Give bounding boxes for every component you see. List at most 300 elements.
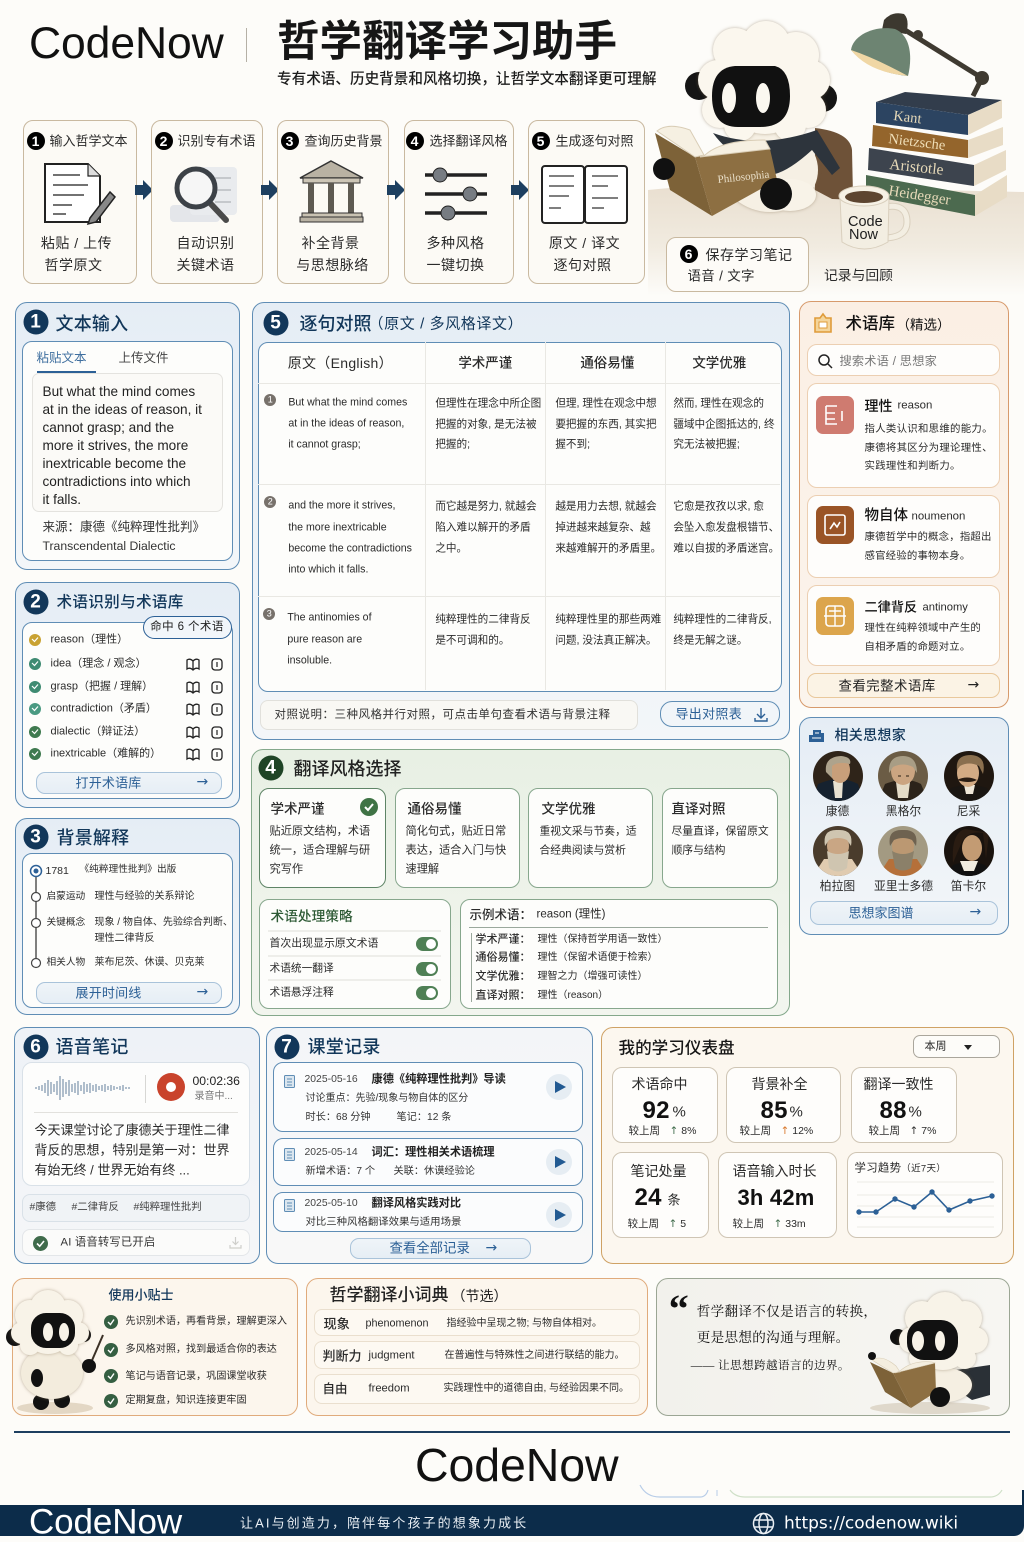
panel 5: comparison: 5 [270,312,281,333]
step card 6: 6 [685,246,692,262]
panel 4: translation style: 理性（保持哲学用语一致性） [538,934,668,944]
tip list [104,1315,118,1408]
panel 5: comparison: 逐句对照 [300,314,372,334]
panel: dashboard: 较上周 [628,1217,659,1229]
button: 查看全部记录 [390,1240,470,1255]
panel 3: background: 相关人物 [46,957,85,968]
panel 6: voice note: #康德 [30,1201,56,1212]
panel: tips: 多风格对照，找到最适合你的表达 [126,1343,277,1354]
comparison table: pure reason are [287,634,362,646]
panel 4: translation style: 简化句式，贴近日常 [406,825,506,837]
source text: But what the mind comes [42,384,195,398]
panel 7: class records: 关联：休谟经验论 [394,1165,475,1176]
button: 打开术语库 [76,775,142,790]
comparison table: 1 [268,395,273,405]
panel: dashboard: ↑ 12% [780,1124,813,1136]
arrow 3 [387,180,404,200]
panel 4: translation style: 理智之力（增强可读性） [538,970,648,982]
panel: dashboard: 翻译一致性 [864,1076,934,1092]
panel: dashboard: 学习趋势（近7天） [854,1162,946,1174]
panel: glossary: 自相矛盾的命题对立。 [864,641,970,652]
panel 4: translation style: 术语悬浮注释 [270,986,334,998]
button [810,900,998,924]
panel: thinkers: 康德 [826,804,849,818]
comparison table: 原文（English） [288,355,393,371]
panel 5: comparison: （原文 / 多风格译文） [368,315,523,332]
panel: dashboard: ↑ 7% [910,1124,936,1136]
panel: glossary: 物自体 [864,507,908,523]
term card: reason [806,382,1000,488]
panel: dashboard: 较上周 [732,1217,764,1229]
panel 7: class records: 7 [281,1036,292,1057]
panel: dashboard: ↑ 8% [670,1124,696,1136]
comparison table: 越是用力去想, 就越会 [555,501,657,513]
panel 1: text input: 来源：康德《纯粹理性批判》 [42,519,205,533]
panel: dashboard: 背景补全 [752,1076,808,1092]
comparison table: 而它越是努力, 就越会 [435,501,537,513]
comparison table: 它愈是孜孜以求, 愈 [673,501,764,513]
panel: dashboard: 语音输入时长 [732,1162,816,1178]
panel: dictionary: 哲学翻译小词典 [330,1285,448,1304]
book stack: Aristotle [889,156,944,179]
lamp [851,13,989,96]
step card 2: 自动识别 [176,234,234,250]
source text: cannot grasp; and the [42,420,174,434]
comparison table: insoluble. [287,655,332,667]
term list: inextricable（难解的） [50,747,161,759]
term list: contradiction（矛盾） [50,702,157,714]
panel: tips [12,1278,298,1416]
comparison table: 终是无解之谜。 [673,635,747,647]
button: → [968,676,979,692]
period selector [912,1034,1000,1058]
panel 4: translation style: 统一，适合理解与研 [270,844,370,856]
comparison table: 会坠入愈发盘根错节、 [673,522,779,534]
button: → [196,984,208,1000]
panel: dashboard: 92 [642,1096,670,1124]
panel: quote: 哲学翻译不仅是语言的转换， [697,1304,877,1319]
panel 4: translation style: 通俗易懂： [476,951,530,963]
mug: Now [849,227,879,243]
panel 1: text input: 上传文件 [118,350,169,364]
footer logo: CodeNow [415,1439,618,1491]
panel: glossary: noumenon [912,510,965,522]
step card 6: 语音 / 文字 [688,268,755,283]
comparison table: 通俗易懂 [580,356,634,371]
step card 4 [404,120,514,284]
subtitle: 专有术语、历史背景和风格切换，让哲学文本翻译更可理解 [277,72,656,88]
panel 6: voice note: 有始无终 / 世界无始有终 ... [34,1162,190,1177]
panel 6: voice note: #纯粹理性批判 [134,1201,202,1212]
panel 3: background [15,818,240,1015]
comparison table: 3 [267,609,272,619]
panel: dashboard: 我的学习仪表盘 [618,1038,735,1057]
panel 3: background: 3 [30,826,41,847]
panel: thinkers: 亚里士多德 [874,879,933,893]
comparison table: 然而, 理性在观念的 [673,398,764,410]
panel 3: background: 理性与经验的关系辩论 [94,890,194,902]
panel 4: translation style: 术语统一翻译 [270,962,334,974]
style card: academic [258,788,386,888]
panel 7: class records: 新增术语：7 个 [306,1165,375,1176]
mascot with pointer [6,1288,104,1414]
panel: tips: 使用小贴士 [108,1287,174,1302]
panel: dashboard: 88 [880,1096,907,1124]
panel: glossary: 理性 [864,398,892,414]
footer right edge [1022,1490,1024,1510]
step card 2: 关键术语 [176,256,234,272]
book stack [866,92,1007,216]
term list: dialectic（辩证法） [50,725,145,737]
panel: quote [656,1278,1010,1416]
hit count pill: 命中 6 个术语 [150,620,224,632]
step card 4: 一键切换 [426,256,484,272]
step card 1 [23,120,137,284]
hit count pill [142,616,232,638]
step card 6 [666,237,809,292]
panel 4: translation style: 学术严谨 [270,801,324,816]
panel 3: background: 现象 / 物自体、先验综合判断、 [94,916,233,928]
comparison table: 2 [268,497,273,507]
comparison table: 把握的; [435,439,470,451]
panel: dashboard: % [790,1103,803,1120]
panel 2: term recognition [15,582,240,808]
panel: dashboard: 24 [634,1184,662,1210]
icon: magnifier [170,166,237,223]
panel 7: class records: 课堂记录 [308,1036,381,1056]
step card 5: 生成逐句对照 [556,133,634,148]
panel: quote: —— 让思想跨越语言的边界。 [691,1359,850,1372]
panel 6: voice note [14,1027,260,1264]
panel: glossary [799,301,1009,708]
panel 7: class records: 对比三种风格翻译效果与适用场景 [306,1216,461,1227]
panel 6: voice note: 语音笔记 [56,1036,129,1056]
panel: thinkers: 尼采 [957,804,980,818]
panel 7: class records: 讨论重点：先验/现象与物自体的区分 [306,1092,468,1104]
comparison table: 究无法被把握; [673,439,740,451]
panel: glossary: 康德将其区分为理论理性、 [864,442,993,453]
panel: dashboard: ↑ 5 [668,1217,686,1229]
icon: building [809,730,824,742]
panel 7: class records: 翻译风格实践对比 [372,1197,461,1209]
panel: dictionary: 现象 [324,1316,350,1331]
panel: dashboard: % [908,1103,922,1120]
style card: popular [394,788,520,888]
title: 哲学翻译学习助手 [277,19,617,66]
panel: dashboard: 85 [760,1096,788,1124]
panel: tips: 笔记与语音记录，巩固课堂收获 [126,1370,267,1381]
source text: at in the ideas of reason, it [42,402,202,416]
record 2 [272,1138,582,1186]
footer bar [0,1505,1024,1536]
step card 3: 3 [286,132,293,148]
button: → [970,904,981,920]
panel: dictionary: 在普遍性与特殊性之间进行联结的能力。 [444,1350,624,1360]
style card: literal [662,788,778,888]
panel 7: class records: 时长：68 分钟 [306,1111,371,1122]
panel: glossary: 感官经验的事物本身。 [864,550,970,561]
record button [157,1073,185,1101]
arrow 1 [135,180,151,200]
portraits [813,751,994,876]
metric: term hits [612,1066,718,1142]
panel 4: translation style: 术语处理策略 [270,909,353,924]
panel 4: translation style: reason (理性) [536,908,606,920]
icon: clipboard [814,312,832,333]
panel 6: voice note: 6 [30,1036,41,1057]
panel 3: background: 《纯粹理性批判》出版 [80,864,176,875]
step card 1: 粘贴 / 上传 [41,234,112,250]
comparison table [258,342,782,692]
button: 查看完整术语库 [838,678,936,693]
panel 2: term recognition: 术语识别与术语库 [56,594,184,611]
step card 5 [528,120,645,284]
panel: dashboard: 较上周 [868,1124,900,1136]
mug: Code [848,214,883,230]
panel: dashboard: 笔记处量 [630,1162,686,1178]
term list: reason（理性） [50,633,128,645]
button [36,982,222,1004]
comparison table: at in the ideas of reason, [288,418,404,430]
comparison table: into which it falls. [288,564,368,576]
step card 4: 多种风格 [426,234,484,250]
footer bar: CodeNow [29,1502,182,1542]
export button: 导出对照表 [676,706,742,721]
panel 4: translation style: 直译对照： [476,989,530,1001]
term list [29,633,223,761]
button: → [196,774,208,790]
mug [839,186,907,249]
panel: thinkers: 柏拉图 [820,879,855,893]
icon: sliders [425,168,487,220]
comparison table: 来越难解开的矛盾里。 [555,543,661,555]
panel: dictionary: judgment [368,1349,415,1361]
panel: glossary: reason [898,399,932,411]
comparison table: 陷入难以解开的矛盾 [435,522,531,534]
panel 4: translation style: 通俗易懂 [408,801,462,816]
panel 4: translation style: 尽量直译，保留原文 [672,825,769,837]
panel: glossary: （精选） [896,317,950,332]
book stack: Heidegger [887,183,952,209]
panel 4: translation style: 示例术语： [470,907,532,921]
record 1 [272,1062,582,1132]
book stack: Nietzsche [888,131,946,154]
note [260,700,638,730]
record 3 [272,1192,582,1232]
icon: open book [541,165,628,224]
panel: dashboard: ↑ 33m [774,1217,806,1229]
step card 3: 与思想脉络 [296,256,369,272]
book Philosophia [653,126,792,216]
source text: it falls. [42,492,81,506]
comparison table: the more inextricable [288,522,387,534]
panel 4: translation style: 究写作 [270,863,303,875]
panel 7: class records: 2025-05-14 [304,1146,358,1157]
export button [660,700,780,726]
waveform [35,1076,130,1100]
comparison table: 之中。 [435,543,467,555]
icon: document and pencil [44,163,116,225]
comparison table: The antinomies of [287,612,372,624]
panel: dashboard: 3h 42m [738,1184,815,1210]
search box [806,344,1000,376]
panel 6: voice note: 背反的思想，特别是第一对：世界 [34,1142,230,1157]
panel: glossary: 康德哲学中的概念，指超出 [864,531,992,542]
panel: dictionary: freedom [368,1382,410,1394]
metric: background [726,1066,840,1142]
panel: dictionary [306,1278,648,1416]
book Philosophia: Philosophia [717,169,770,186]
panel 4: translation style: 速理解 [406,863,439,875]
transcription status [22,1228,250,1256]
comparison table: 掉进越来越复杂、越 [555,522,651,534]
header logo: CodeNow [29,19,224,68]
step card 2: 识别专有术语 [178,133,256,148]
panel: thinkers: 笛卡尔 [951,879,986,893]
panel 4: translation style: 表达，适合入门与快 [406,844,506,856]
panel: glossary: 术语库 [846,314,895,332]
step card 3 [277,120,389,284]
panel: glossary: 指人类认识和思维的能力。 [864,423,993,434]
panel: dictionary: （节选） [452,1288,508,1304]
row: judgment [314,1340,640,1368]
panel 3: background: 1781 [46,864,69,876]
panel 3: background: 关键概念 [46,917,85,928]
bottom rule [14,1431,1010,1433]
panel: glossary: antinomy [922,601,968,613]
panel: glossary: 理性在纯粹领域中产生的 [864,622,981,633]
button: 思想家图谱 [848,905,914,920]
panel 5: comparison [252,302,790,740]
panel 4: translation style: 合经典阅读与赏析 [540,844,626,856]
panel 3: background: 背景解释 [56,828,129,848]
panel 7: class records: 康德《纯粹理性批判》导读 [372,1073,506,1085]
row: freedom [314,1374,640,1404]
panel 4: translation style: 4 [265,757,276,778]
term strategy [258,898,450,1008]
panel 1: text input: 粘贴文本 [36,350,87,364]
panel 7: class records: 2025-05-16 [304,1073,358,1084]
step card 3: 补全背景 [302,234,360,250]
panel 4: translation style: 学术严谨： [476,933,530,945]
panel 6: voice note: 今天课堂讨论了康德关于理性二律 [34,1122,230,1137]
term list: grasp（把握 / 理解） [50,680,153,692]
comparison table: 是不可调和的。 [435,635,509,647]
source text: contradictions into which [42,474,191,488]
step card 3: 查询历史背景 [304,133,383,148]
comparison table: 但理, 理性在观念中想 [555,398,657,410]
panel 1: text input: Transcendental Dialectic [42,538,176,552]
mascot [685,21,840,212]
panel 3: background: 莱布尼茨、休谟、贝克莱 [94,956,204,968]
step 6 caption: 记录与回顾 [824,268,893,283]
comparison table: But what the mind comes [288,397,407,409]
comparison table: it cannot grasp; [288,439,361,451]
panel: dictionary: 指经验中呈现之物; 与物自体相对。 [446,1318,602,1328]
panel 4: translation style: 重视文采与节奏，适 [540,825,637,837]
panel 7: class records: 2025-05-10 [304,1197,358,1208]
step card 5: 原文 / 译文 [549,234,620,250]
arrow 4 [511,180,528,200]
panel: dashboard: 术语命中 [632,1076,688,1092]
panel: dashboard: 较上周 [628,1124,660,1136]
term list: idea（理念 / 观念） [50,657,146,669]
button [350,1238,530,1258]
panel 4: translation style: 文学优雅： [476,970,530,982]
panel: dashboard [601,1027,1014,1264]
comparison table: become the contradictions [288,543,412,555]
step card 2 [151,120,263,284]
metric: voice duration [718,1152,836,1238]
panel: glossary: 实践理性和判断力。 [864,460,961,471]
book stack: Kant [893,108,922,127]
panel 4: translation style: 理性（保留术语便于检索） [538,952,658,962]
metric: notes [612,1152,708,1238]
example term [460,898,778,1008]
leftover panel edges [640,1484,1002,1498]
step card 1: 哲学原文 [44,256,102,272]
panel: dashboard: 较上周 [740,1124,771,1136]
panel 3: background: 理性二律背反 [94,932,154,944]
arrow 2 [261,180,277,200]
icon: globe [752,1512,774,1534]
step card 1: 输入哲学文本 [50,133,128,148]
comparison table: 难以自拔的矛盾迷宫。 [673,543,779,555]
panel 4: translation style: 顺序与结构 [672,844,725,856]
step card 6: 保存学习笔记 [706,246,792,262]
panel 6: voice note: 00:02:36 [192,1073,240,1087]
panel: tips: 先识别术语，再看背景，理解更深入 [126,1315,287,1326]
panel 4: translation style: 理性（reason） [538,990,608,1000]
panel 6: voice note: AI 语音转写已开启 [60,1236,155,1248]
panel: dictionary: 自由 [322,1381,348,1395]
panel: thinkers: 相关思想家 [834,726,906,742]
comparison table: 文学优雅 [692,356,746,371]
panel 1: text input: 1 [30,311,41,332]
panel 2: term recognition: 2 [30,591,41,612]
step card 4: 4 [411,132,418,148]
comparison table: 纯粹理性的二律背反, [673,614,772,626]
comparison table: 握不到; [555,439,590,451]
panel: dictionary: phenomenon [366,1317,429,1329]
panel: quote: “ [669,1286,689,1331]
timeline [30,864,42,968]
period selector: 本周 [924,1040,946,1052]
panel: dashboard: 条 [668,1192,681,1207]
button: 展开时间线 [76,985,142,1000]
chart: study trend [846,1152,1002,1238]
term card: antinomy [806,584,1000,666]
icon: temple [300,160,364,222]
button [806,672,1000,698]
panel 4: translation style: 翻译风格选择 [294,758,402,778]
panel: glossary: 二律背反 [864,599,917,614]
panel: dictionary: 实践理性中的道德自由, 与经验因果不同。 [444,1382,629,1394]
comparison table: 要把握的东西, 其实把 [555,419,657,431]
panel 4: translation style: 文学优雅 [542,801,596,816]
step card 5: 逐句对照 [554,256,612,272]
source text [32,372,222,512]
mascot reading [868,1290,990,1414]
desk [648,186,1024,296]
footer bar: 让AI与创造力，陪伴每个孩子的想象力成长 [240,1516,528,1530]
comparison table: 把握的对象, 是无法被 [435,419,537,431]
panel 6: voice note: #二律背反 [72,1201,119,1212]
panel: glossary: 搜索术语 / 思想家 [840,353,937,367]
chair [815,128,853,199]
row: phenomenon [314,1308,640,1336]
panel 4: translation style: 直译对照 [672,801,726,816]
